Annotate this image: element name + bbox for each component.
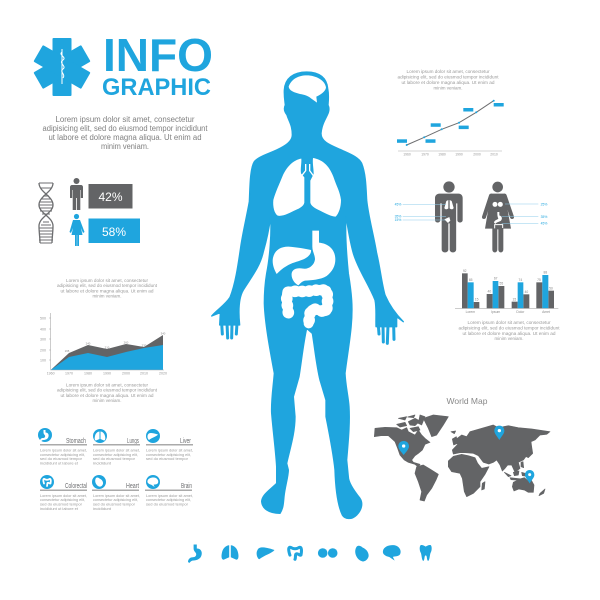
text block: below bar chart (458, 320, 560, 341)
panel: heart: consectetur adipisicing elit, (93, 498, 138, 502)
bar chart: 75 (537, 278, 541, 282)
map title: World Map (446, 396, 488, 406)
bar chart: 15 (475, 298, 479, 302)
icon: male anatomy figure: 45% (395, 203, 401, 207)
organ: colon (287, 290, 328, 323)
panel: stomach: incididunt ut labore et (40, 462, 79, 466)
panel: lungs: consectetur adipisicing elit, (93, 453, 138, 457)
organ: liver (273, 247, 311, 274)
panel: male percentage: 42% (98, 190, 123, 204)
icon: stomach (188, 544, 202, 563)
greenland (423, 415, 448, 437)
intro text: Lorem ipsum dolor sit amet, consectetur (56, 115, 195, 124)
text block: above line chart: Lorem ipsum dolor sit amet, consectetur (406, 69, 490, 74)
text block: below bar chart: minim veniam. (494, 336, 524, 341)
panel: stomach (38, 428, 87, 466)
panel: colorectal (40, 475, 87, 511)
title: GRAPHIC (102, 74, 211, 101)
icon: male figure (70, 178, 83, 210)
line chart: 2010 (490, 152, 498, 156)
text block: above line chart (398, 69, 499, 90)
panel: colorectal: Colorectal (65, 483, 87, 490)
text block: above line chart: minim veniam. (434, 86, 462, 90)
line chart: 1990 (455, 152, 463, 156)
panel: colorectal: sed do eiusmod tempor (40, 502, 83, 506)
panel: heart: Heart (126, 483, 139, 490)
madagascar (482, 482, 485, 490)
icon: female anatomy figure (484, 182, 547, 252)
text block: above area chart: Lorem ipsum dolor sit amet, consectetur (66, 278, 148, 283)
world map (374, 415, 550, 501)
line chart: 1960 (403, 152, 411, 156)
icon: male anatomy figure (395, 181, 463, 252)
bar chart: 65 (469, 278, 473, 282)
intro text (42, 115, 208, 151)
pin: north america (398, 441, 409, 455)
text block: below area chart (57, 382, 158, 403)
panel: liver: Liver (180, 438, 191, 445)
icon: female anatomy figure: 45% (541, 222, 547, 226)
panel: brain: Lorem ipsum dolor sit amet, (146, 494, 193, 498)
fingers (222, 323, 394, 343)
panel: brain (145, 475, 193, 506)
panel: liver: consectetur adipisicing elit, (146, 453, 191, 457)
icon: heart (355, 546, 369, 561)
area chart: 210 (105, 346, 110, 350)
panel: lungs: Lorem ipsum dolor sit amet, (93, 448, 140, 452)
text block: below bar chart: ut labore et dolore magna aliqua. Ut enim ad (462, 331, 556, 336)
text block: below bar chart: adipisicing elit, sed do eiusmod tempor incididunt (458, 326, 560, 330)
japan (526, 447, 533, 458)
bar chart: 50 (549, 286, 553, 290)
panel: female percentage (88, 218, 140, 243)
area chart: 260 (124, 340, 129, 344)
panel: lungs: sed do eiusmod tempor (93, 457, 136, 461)
text block: below area chart: minim veniam. (92, 398, 122, 403)
bar chart: Lorem (466, 310, 475, 314)
text block: below area chart: adipisicing elit, sed do eiusmod tempor incididunt (57, 388, 158, 393)
new zealand (539, 489, 545, 496)
title: INFO (103, 29, 213, 81)
bar chart: 40 (524, 290, 528, 294)
organ: left lung (273, 159, 304, 216)
area chart: 230 (142, 344, 147, 348)
panel: heart: incididunt (93, 507, 112, 511)
organ: trachea (302, 164, 313, 176)
area chart (40, 313, 167, 376)
text block: below bar chart: Lorem ipsum dolor sit amet, consectetur (468, 320, 551, 325)
icon: male anatomy figure: 15% (395, 218, 401, 222)
area chart: 300 (40, 338, 46, 342)
bar chart (455, 269, 558, 314)
area chart: 100 (40, 358, 46, 362)
australia (512, 478, 534, 492)
panel: colorectal: consectetur adipisicing elit, (40, 498, 85, 502)
panel: heart: sed do eiusmod tempor (93, 502, 136, 506)
panel: brain: Brain (181, 483, 192, 490)
panel: stomach: Stomach (66, 438, 86, 445)
intro text: adipisicing elit, sed do eiusmod tempor incididunt (42, 124, 208, 133)
area chart: 165 (65, 349, 70, 353)
south america (415, 465, 438, 501)
panel: female percentage: 58% (102, 225, 126, 239)
panel: stomach: Lorem ipsum dolor sit amet, (40, 448, 87, 452)
icon: brain (383, 545, 401, 561)
panel: stomach: consectetur adipisicing elit, (40, 453, 85, 457)
panel: stomach: sed do eiusmod tempor (40, 457, 83, 461)
text block: above area chart: ut labore et dolore magna aliqua. Ut enim ad (60, 288, 154, 293)
panel: colorectal: incididunt ut labore et (40, 507, 79, 511)
bar chart: Dolor (516, 310, 525, 314)
europe and asia (452, 425, 550, 472)
icon: female figure (69, 214, 84, 246)
bar chart: 67 (494, 277, 498, 281)
panel: brain: sed do eiusmod tempor (146, 502, 189, 506)
icon: female anatomy figure: 25% (541, 202, 547, 206)
line chart: 1970 (421, 152, 429, 156)
area chart: 1970 (65, 372, 73, 376)
text block: below area chart: ut labore et dolore magna aliqua. Ut enim ad (60, 393, 154, 398)
area chart: 1980 (84, 372, 92, 376)
panel: lungs: Lungs (127, 438, 139, 445)
area chart: 400 (40, 328, 46, 332)
line chart: 2000 (473, 152, 481, 156)
organ: right lung (310, 158, 341, 217)
icon: colon (289, 547, 301, 559)
text block: above line chart: ut labore et dolore magna aliqua. Ut enim ad (402, 80, 495, 85)
icon: lungs (222, 545, 238, 560)
area chart: 2020 (159, 372, 167, 376)
panel: liver: sed do eiusmod tempor (146, 457, 189, 461)
text block: above area chart: minim veniam. (92, 294, 122, 299)
icon: tooth (420, 545, 432, 561)
icon: female anatomy figure: 35% (541, 215, 547, 219)
north america (374, 427, 430, 467)
line chart (397, 100, 504, 156)
bar chart: 55 (499, 282, 503, 286)
bar chart: Ipsum (491, 310, 500, 314)
panel: liver (146, 429, 193, 461)
area chart: 500 (40, 316, 46, 320)
bar chart: 92 (463, 269, 467, 273)
organ: stomach (292, 231, 335, 285)
panel: lungs (93, 429, 140, 466)
intro text: minim veniam. (101, 142, 149, 151)
bar chart: 40 (487, 290, 491, 294)
panel: colorectal: Lorem ipsum dolor sit amet, (40, 494, 87, 498)
area chart: 240 (86, 342, 91, 346)
intro text: ut labore et dolore magna aliqua. Ut enim ad (48, 133, 202, 142)
pin: russia (494, 426, 504, 440)
icon: male anatomy figure: 35% (395, 214, 401, 218)
panel: heart (92, 475, 140, 511)
bar chart: 74 (518, 278, 522, 282)
bar chart: Amet (542, 310, 550, 314)
icon: dna helix (39, 183, 53, 243)
area chart: 1990 (103, 372, 111, 376)
icon: liver (257, 547, 274, 559)
bar chart: 15 (512, 297, 516, 301)
panel: brain: consectetur adipisicing elit, (146, 498, 191, 502)
area chart: 2000 (122, 372, 130, 376)
panel: male percentage (88, 184, 132, 208)
panel: lungs: incididunt (93, 462, 112, 466)
icon row: organs (188, 544, 432, 563)
indonesia and philippines (504, 462, 530, 480)
area chart: 340 (161, 332, 166, 336)
icon: star of life (33, 38, 91, 96)
bar chart: 88 (543, 271, 547, 275)
text block: below area chart: Lorem ipsum dolor sit amet, consectetur (66, 382, 148, 388)
organ: brain (289, 75, 326, 103)
text block: above area chart (57, 278, 158, 299)
panel: heart: Lorem ipsum dolor sit amet, (93, 494, 140, 498)
area chart: 2010 (140, 372, 148, 376)
icon: kidneys (318, 548, 338, 558)
panel: liver: Lorem ipsum dolor sit amet, (146, 448, 193, 452)
british isles and iceland (451, 431, 458, 445)
africa (448, 454, 489, 497)
line chart: 1980 (438, 152, 446, 156)
area chart: 200 (40, 348, 46, 352)
pin: australia (525, 470, 534, 483)
text block: above area chart: adipisicing elit, sed do eiusmod tempor incididunt (57, 283, 158, 288)
body silhouette with organs (212, 72, 403, 518)
text block: above line chart: adipisicing elit, sed do eiusmod tempor incididunt (398, 74, 499, 80)
arctic islands (397, 415, 425, 432)
area chart: 1960 (47, 372, 55, 376)
